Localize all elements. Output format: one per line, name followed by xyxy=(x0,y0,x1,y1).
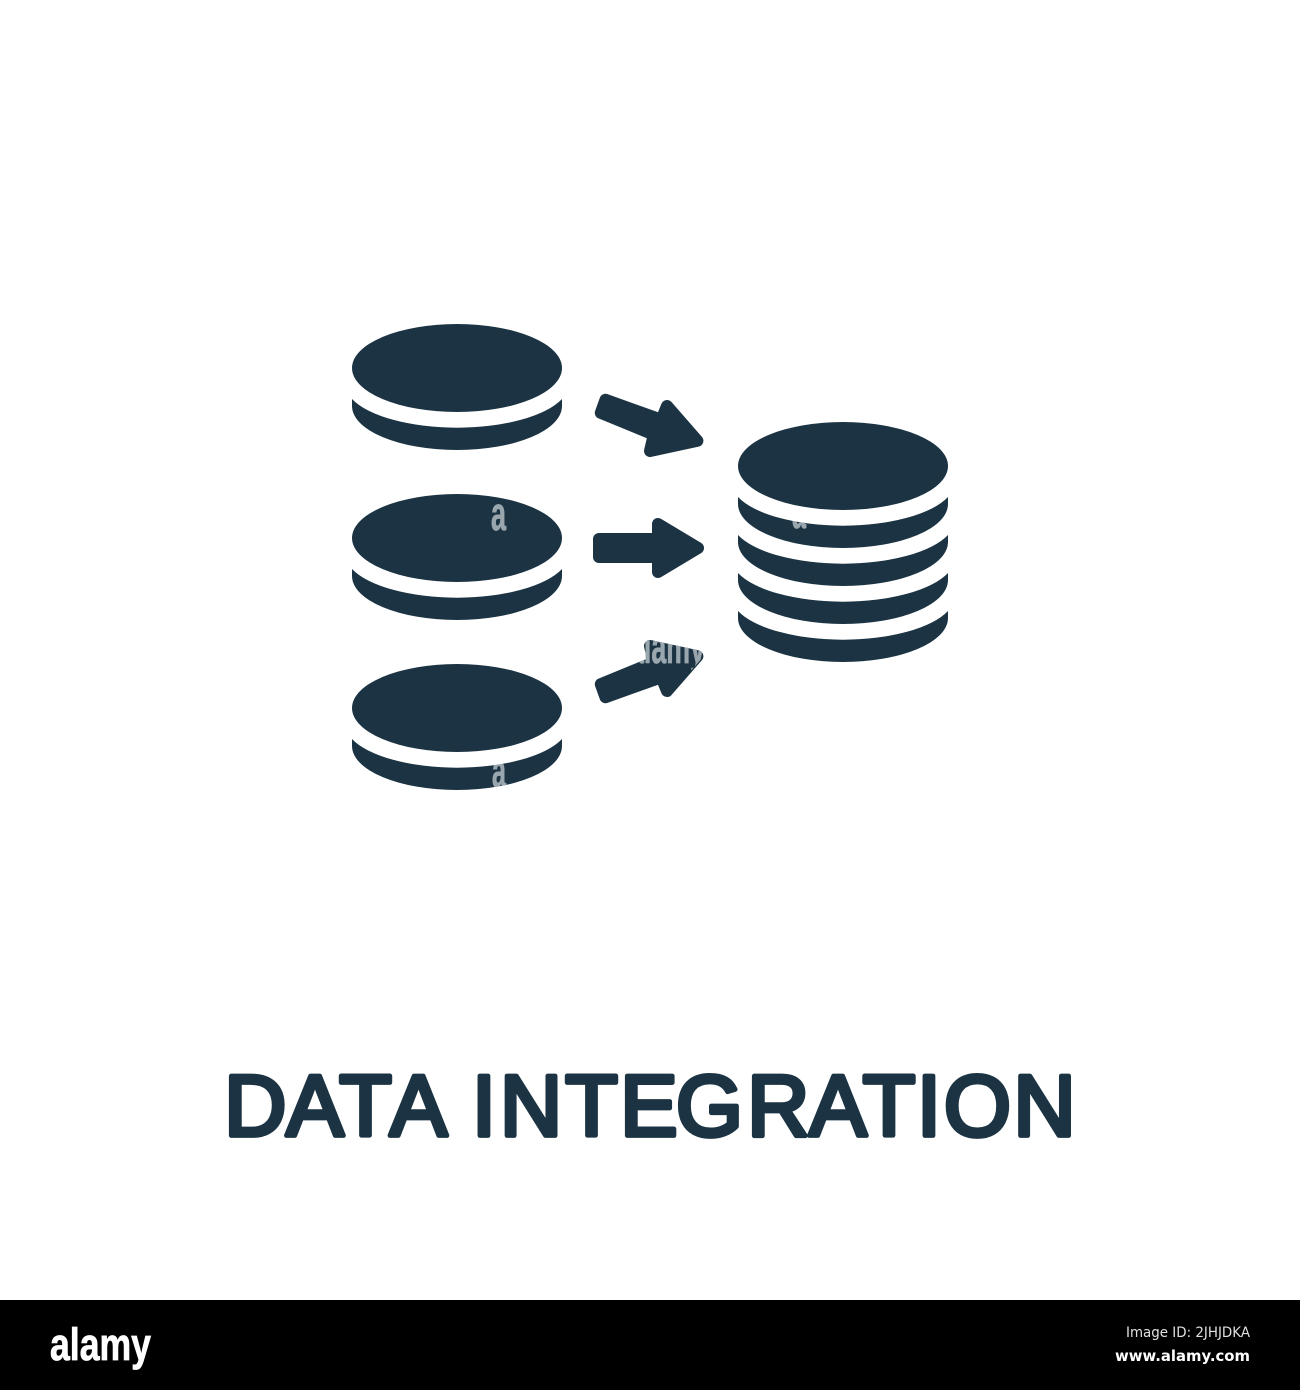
watermark letter on bottom source: a xyxy=(492,744,506,797)
title: DATA INTEGRATION xyxy=(224,1058,1076,1154)
footer url: www.alamy.com xyxy=(1115,1347,1250,1365)
arrow: top source to target xyxy=(601,400,697,451)
icon: source database top xyxy=(352,324,562,450)
watermark letter on middle source: a xyxy=(491,487,506,540)
watermark fragments xyxy=(491,485,806,797)
footer logo: alamy xyxy=(50,1319,151,1370)
watermark word on bottom arrow: alamy xyxy=(629,620,705,673)
footer bar xyxy=(0,1300,1300,1390)
icon: source database bottom xyxy=(352,664,562,790)
footer image id: Image ID: 2JHJDKA xyxy=(1126,1325,1250,1341)
arrow: bottom source to target xyxy=(601,646,697,697)
icon: target database stack xyxy=(738,422,948,662)
icon: data integration xyxy=(352,324,948,790)
icon: source database middle xyxy=(352,494,562,620)
arrow: middle source to target xyxy=(599,524,698,572)
watermark letter on target stack: a xyxy=(792,485,806,538)
